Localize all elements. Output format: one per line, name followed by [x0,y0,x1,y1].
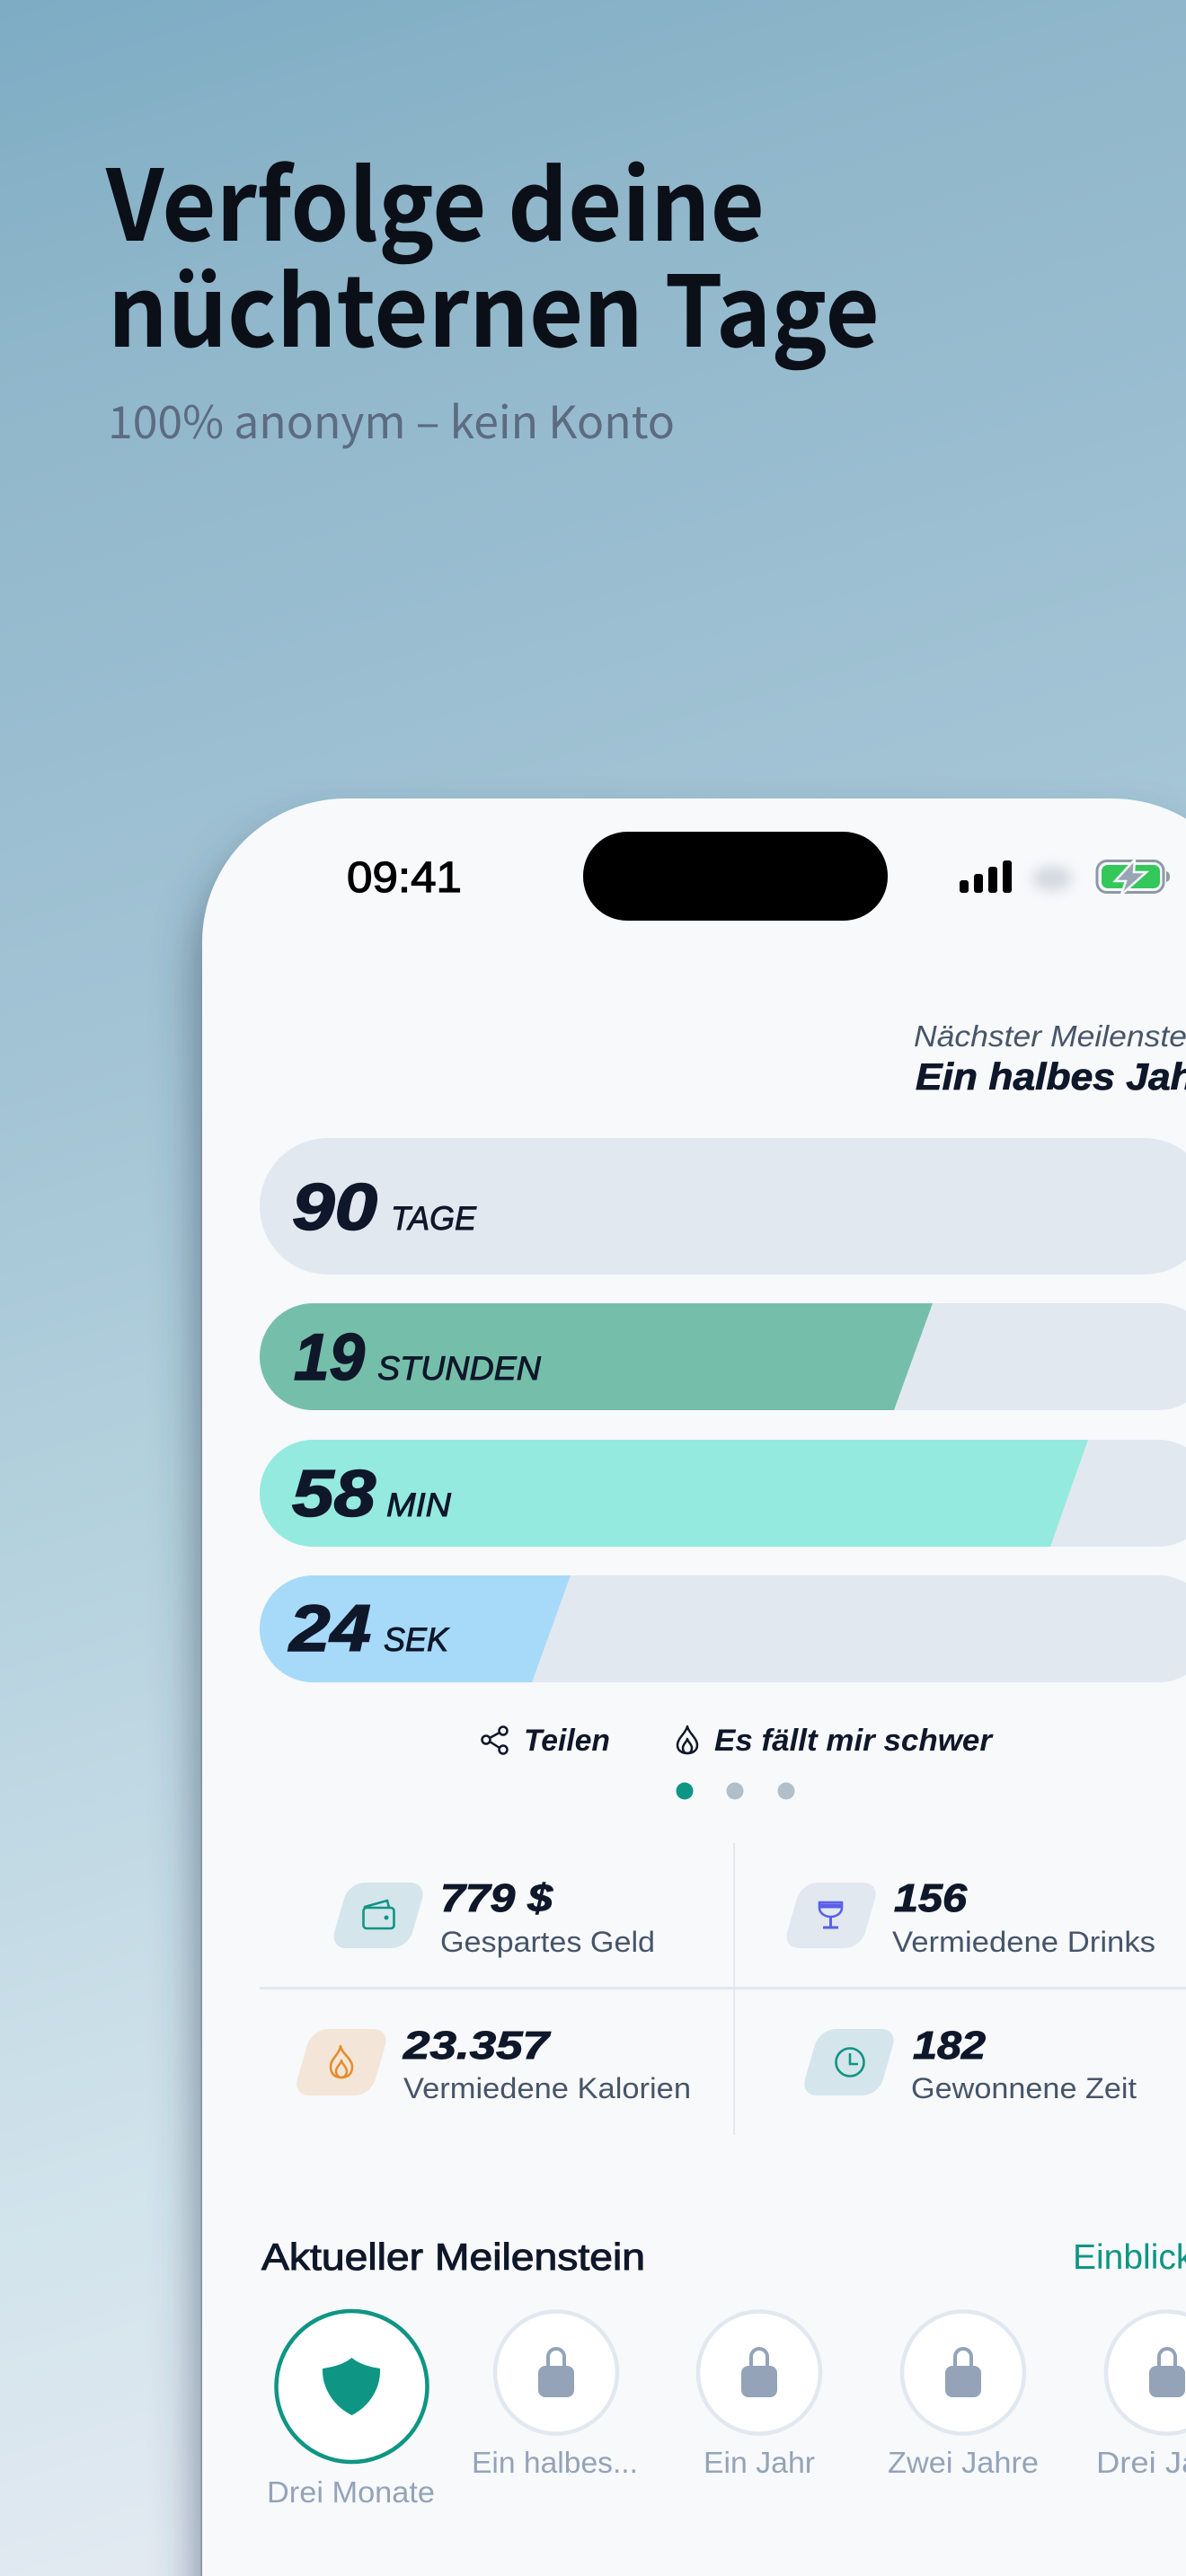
stat: saved money: Gespartes Geld [440,1926,655,1958]
bar: seconds: SEK [384,1621,450,1658]
subtitle: 100% anonym – kein Konto [108,387,675,452]
icon: flame chip [293,2029,390,2095]
milestone: three months [267,2311,435,2509]
icon: glass chip [783,1883,880,1948]
bar: hours [260,1303,1186,1410]
pagination dots [676,1782,794,1800]
milestone: two years [888,2312,1039,2479]
milestone: two years: Zwei Jahre [888,2446,1039,2479]
stat: avoided drinks: 156 [894,1876,968,1920]
bar: hours: 19 [294,1321,365,1394]
milestone: half a year [472,2312,638,2479]
icon: battery charging [1097,860,1170,895]
icon: lock [1149,2349,1185,2397]
title: nüchternen Tage [108,234,880,375]
bar: days [260,1138,1186,1275]
stat: avoided calories: 23.357 [403,2024,552,2068]
icon: shield [323,2358,380,2415]
icon: lock [945,2349,981,2397]
stat: avoided drinks: Vermiedene Drinks [892,1926,1155,1958]
stat: saved money: 779 $ [440,1876,553,1920]
share action [482,1724,610,1758]
bar: minutes: 58 [292,1458,376,1531]
stat: avoided drinks [783,1876,1155,1958]
icon: lock [538,2349,574,2397]
icon: lock [741,2349,777,2397]
milestone: three years [1096,2312,1186,2479]
stat: saved money [330,1876,655,1958]
status time: 09:41 [347,854,462,902]
stat: time gained: Gewonnene Zeit [911,2072,1137,2104]
next milestone label [914,1019,1186,1098]
title: Verfolge deine [105,128,765,269]
dynamic island [583,832,888,921]
bar: seconds [260,1575,1186,1682]
milestone: half a year: Ein halbes... [472,2446,638,2479]
bar: hours: STUNDEN [377,1350,541,1387]
next milestone label: Nächster Meilenste [914,1019,1186,1053]
bar: days: TAGE [391,1200,477,1237]
blurred network label [1032,866,1072,891]
heading: current milestone: Aktueller Meilenstein [261,2236,645,2278]
icon: clock chip [801,2029,898,2095]
struggling action: Es fällt mir schwer [714,1724,994,1758]
share action: Teilen [524,1724,610,1758]
icon: share [482,1726,507,1753]
icon: wallet chip [330,1883,427,1948]
icon: signal bars [960,860,1012,893]
title [105,128,880,375]
milestone: one year [698,2312,820,2479]
bar: seconds: 24 [288,1592,371,1665]
stat: time gained [801,2024,1137,2104]
bar: days: 90 [292,1171,377,1244]
bar: minutes [260,1440,1186,1547]
panel: phone [197,798,1186,2576]
bar: minutes: MIN [386,1486,451,1523]
stat: time gained: 182 [913,2024,987,2068]
milestone: three months: Drei Monate [267,2475,435,2509]
icon: flame [677,1726,697,1753]
milestone: one year: Ein Jahr [704,2446,815,2479]
stat: avoided calories [293,2024,691,2104]
stat: avoided calories: Vermiedene Kalorien [403,2072,691,2104]
